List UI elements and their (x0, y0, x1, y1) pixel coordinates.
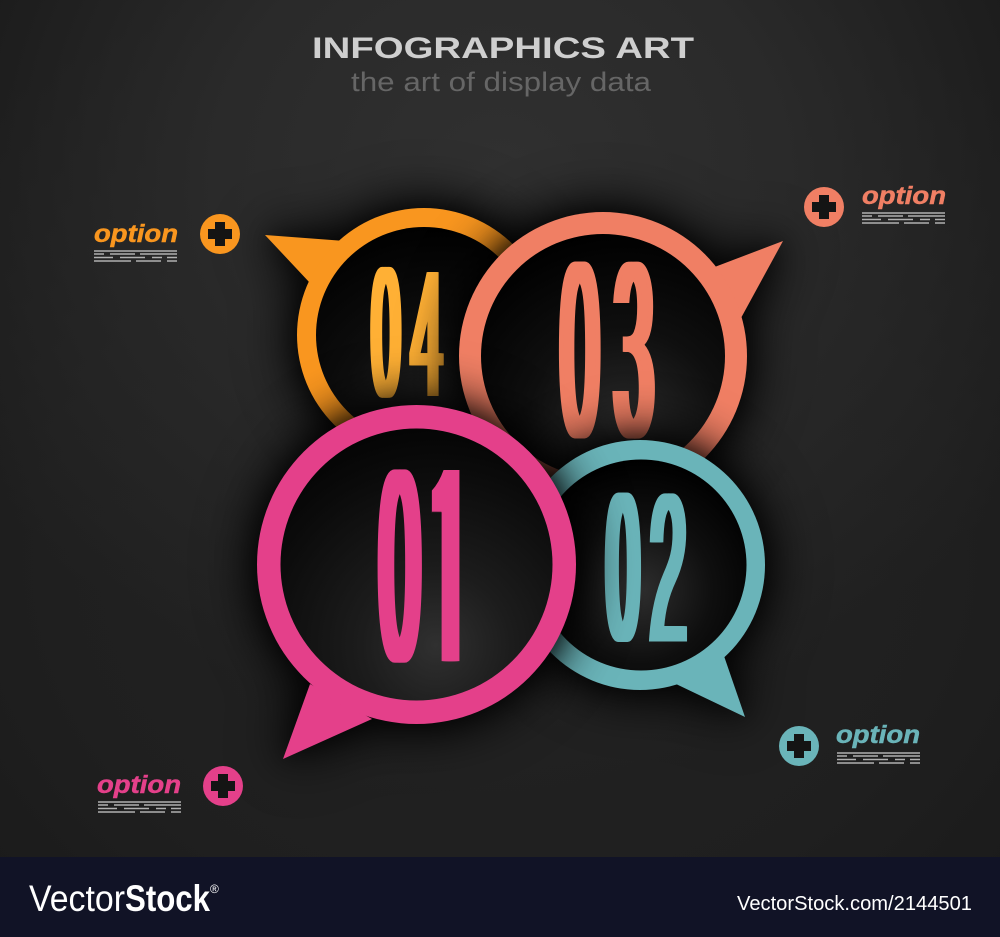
footer band (0, 857, 1000, 937)
option label: salmon (862, 182, 946, 223)
number 01: 1 (426, 435, 473, 708)
option label: pink (97, 771, 181, 812)
option label: teal: option (836, 721, 920, 749)
option label: teal (836, 721, 920, 763)
bubble 02 teal (534, 392, 790, 724)
footer logo: Stock (125, 878, 210, 919)
plus icon: teal (779, 726, 819, 766)
option label: salmon: option (862, 182, 946, 210)
subtitle: the art of display data (351, 67, 652, 97)
bubble 03 salmon (410, 184, 792, 489)
bubble 04 orange (259, 180, 520, 436)
option label: orange (94, 220, 178, 261)
footer logo: Vector (29, 878, 125, 919)
plus icon: orange (200, 214, 240, 254)
number 02: 0 (607, 449, 639, 685)
option label: orange: option (94, 220, 178, 248)
number 04: 4 (411, 250, 442, 427)
number 01: 0 (380, 413, 420, 718)
option label: pink: option (97, 771, 181, 799)
number 01 (378, 413, 473, 718)
footer image id: VectorStock.com/2144501 (737, 893, 972, 915)
number 02 (604, 449, 688, 685)
plus icon: salmon (804, 187, 844, 227)
plus icon: pink (203, 766, 243, 806)
number 03: 3 (614, 236, 653, 475)
number 03: 0 (561, 210, 599, 489)
title: INFOGRAPHICS ART (312, 32, 694, 65)
number 04: 0 (372, 230, 400, 436)
number 03 (558, 210, 655, 489)
bubble 01 pink (232, 356, 619, 766)
footer logo (29, 878, 219, 919)
number 04 (370, 230, 444, 436)
number 02: 2 (650, 471, 687, 677)
footer logo: ® (210, 882, 219, 896)
